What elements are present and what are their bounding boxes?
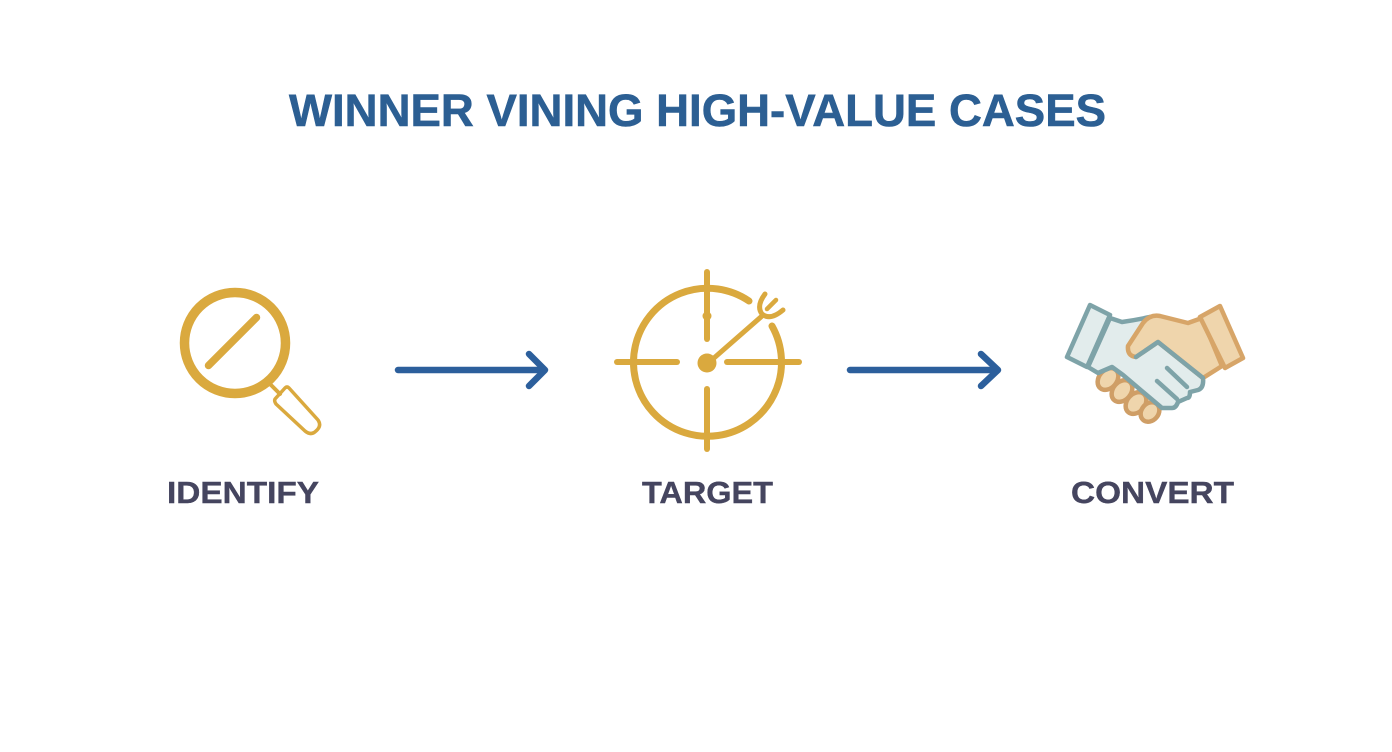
icon: magnifying glass xyxy=(184,292,320,434)
arrow: target to convert xyxy=(850,354,998,386)
left cuff xyxy=(1067,305,1110,367)
thumb edge of left hand xyxy=(1136,342,1203,378)
title: WINNER VINING HIGH-VALUE CASES xyxy=(289,85,1106,136)
label: convert: CONVERT xyxy=(1071,475,1234,510)
label: identify: IDENTIFY xyxy=(167,475,319,510)
right hand xyxy=(1128,316,1222,378)
fingers xyxy=(1093,364,1163,426)
arrow: identify to target xyxy=(398,354,545,386)
finger lines xyxy=(1157,368,1187,399)
right cuff xyxy=(1200,306,1243,368)
left hand xyxy=(1088,317,1203,408)
icon: crosshair target xyxy=(617,272,799,449)
icon: handshake xyxy=(1067,305,1243,426)
label: target: TARGET xyxy=(642,475,773,510)
